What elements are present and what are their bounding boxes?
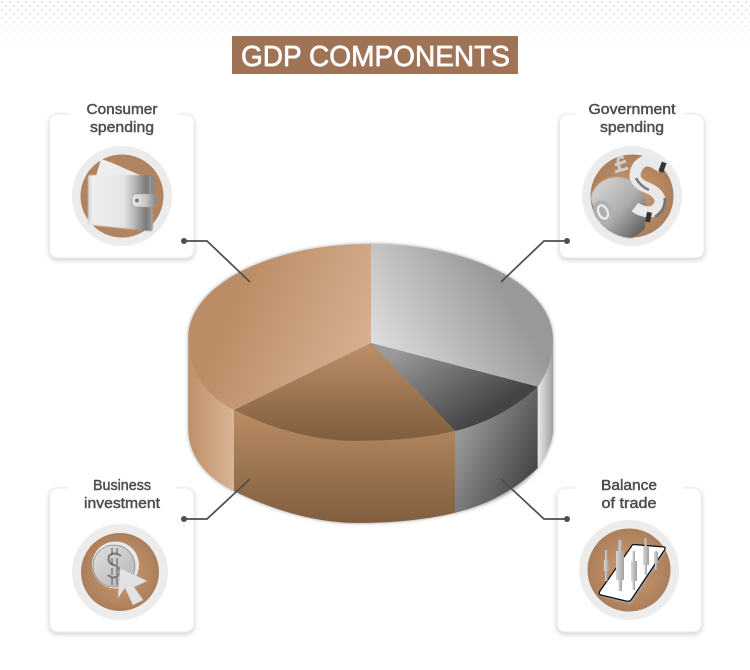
heading: government spending: Government: [588, 102, 676, 118]
connector: consumer spending: [181, 238, 250, 282]
pie chart: [188, 244, 553, 523]
icon: phone with candlesticks: [579, 520, 679, 620]
heading: business investment: Business: [93, 478, 151, 494]
side: business: [234, 410, 455, 523]
connector: government spending: [501, 238, 570, 282]
heading: balance of trade: of trade: [602, 496, 656, 512]
side: consumer: [188, 338, 234, 491]
pie shadow: [188, 244, 553, 523]
side: trade: [455, 387, 538, 513]
panel: business investment: [50, 478, 194, 632]
side: government: [538, 340, 553, 468]
heading: government spending: [588, 102, 676, 136]
heading: consumer spending: [86, 102, 158, 136]
connector: business investment: [181, 479, 250, 522]
panel: balance of trade: [557, 478, 702, 632]
slice: government spending: [371, 244, 553, 387]
heading: consumer spending: Consumer: [86, 102, 158, 118]
slice: business investment: [234, 343, 455, 441]
icon: globe and currencies: [582, 146, 682, 246]
title: GDP COMPONENTS: [241, 41, 510, 73]
slice: balance of trade: [371, 343, 538, 431]
heading: balance of trade: Balance: [601, 478, 657, 494]
icon: wallet: [72, 146, 172, 246]
heading: consumer spending: spending: [90, 120, 154, 136]
panel: government spending: [560, 102, 704, 258]
icon: coin and cursor: [72, 524, 168, 620]
heading: balance of trade: [601, 478, 657, 512]
heading: business investment: investment: [84, 496, 160, 512]
heading: government spending: spending: [600, 120, 664, 136]
panel: consumer spending: [50, 102, 194, 258]
slice: consumer spending: [188, 244, 371, 410]
connector: balance of trade: [501, 479, 570, 522]
heading: business investment: [84, 478, 160, 512]
